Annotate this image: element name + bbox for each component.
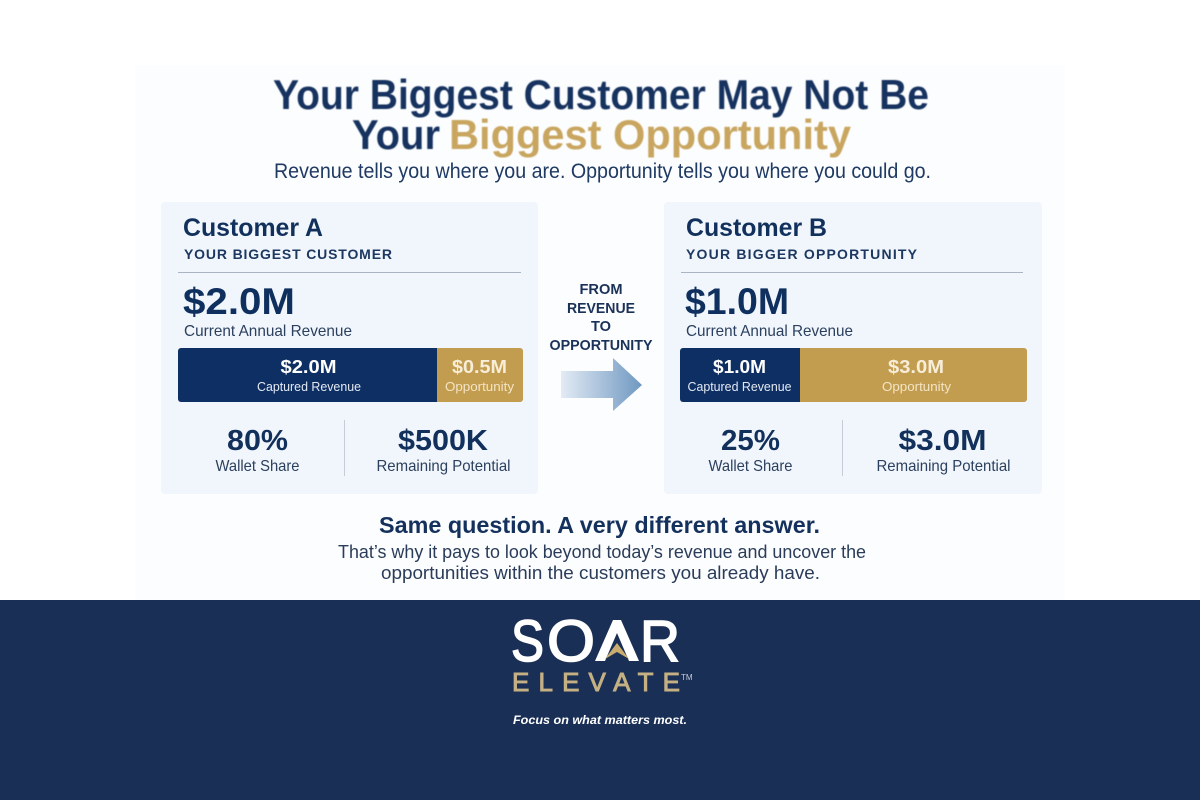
title [273, 71, 929, 158]
bar: captured vs opportunity: $2.0M [280, 357, 336, 377]
heading: customer B: Customer B [686, 214, 827, 242]
title: Your [352, 111, 440, 158]
stat: wallet share [216, 425, 300, 475]
bar: captured vs opportunity: $0.5M [452, 357, 507, 377]
stat: remaining potential: $500K [398, 425, 488, 457]
subtitle: Revenue tells you where you are. Opportunity tells you where you could go. [274, 160, 931, 183]
title: Your Biggest Customer May Not Be [273, 71, 929, 118]
revenue label: Current Annual Revenue [184, 323, 352, 340]
label: your bigger opportunity: YOUR BIGGER OPPORTUNITY [686, 246, 918, 262]
bar: captured vs opportunity: $3.0M [888, 357, 944, 377]
stat: wallet share [708, 425, 793, 475]
logo: SOAR ELEVATE: TM [681, 673, 693, 682]
label: from revenue to opportunity [550, 281, 652, 354]
label: from revenue to opportunity: OPPORTUNITY [550, 337, 652, 354]
bar: captured vs opportunity [178, 348, 523, 402]
conclusion heading: Same question. A very different answer. [379, 512, 820, 538]
bar: captured vs opportunity: Opportunity [445, 379, 515, 394]
logo: SOAR ELEVATE: R [640, 609, 680, 674]
revenue figure: $2.0M [183, 281, 295, 322]
bar: captured vs opportunity: Opportunity [882, 379, 952, 394]
conclusion text: opportunities within the customers you already have. [381, 563, 820, 583]
stat: wallet share: 80% [227, 425, 288, 457]
stat: wallet share: 25% [721, 425, 780, 457]
label: from revenue to opportunity: REVENUE [567, 300, 635, 317]
label: your biggest customer: YOUR BIGGEST CUSTOMER [184, 246, 392, 262]
arrow [561, 358, 642, 411]
stat: remaining potential: Remaining Potential [376, 458, 510, 475]
label: from revenue to opportunity: TO [591, 318, 611, 335]
panel: customer B [664, 202, 1042, 494]
revenue label: Current Annual Revenue [686, 323, 853, 340]
heading: customer A: Customer A [183, 214, 323, 242]
revenue figure: $1.0M [685, 281, 789, 322]
stat: remaining potential [376, 425, 510, 475]
footer band [0, 600, 1200, 800]
conclusion text [338, 542, 866, 583]
conclusion text: That’s why it pays to look beyond today’s revenue and uncover the [338, 542, 866, 562]
logo: SOAR ELEVATE: ELEVATE [512, 667, 680, 697]
logo: SOAR ELEVATE [511, 609, 693, 697]
stat: remaining potential: $3.0M [898, 425, 986, 457]
bar: captured vs opportunity: Captured Revenue [688, 379, 792, 394]
stat: wallet share: Wallet Share [708, 458, 793, 475]
bar: captured vs opportunity: Captured Revenue [257, 379, 361, 394]
logo: SOAR ELEVATE: S [511, 609, 544, 674]
panel: customer A [161, 202, 538, 494]
stat: remaining potential [876, 425, 1010, 475]
title: Biggest Opportunity [449, 111, 852, 158]
bar: captured vs opportunity [680, 348, 1027, 402]
tagline: Focus on what matters most. [513, 713, 687, 727]
stat: remaining potential: Remaining Potential [876, 458, 1010, 475]
logo: SOAR ELEVATE: O [547, 609, 595, 674]
bar: captured vs opportunity: $1.0M [713, 357, 766, 377]
label: from revenue to opportunity: FROM [580, 281, 622, 298]
stat: wallet share: Wallet Share [216, 458, 300, 475]
